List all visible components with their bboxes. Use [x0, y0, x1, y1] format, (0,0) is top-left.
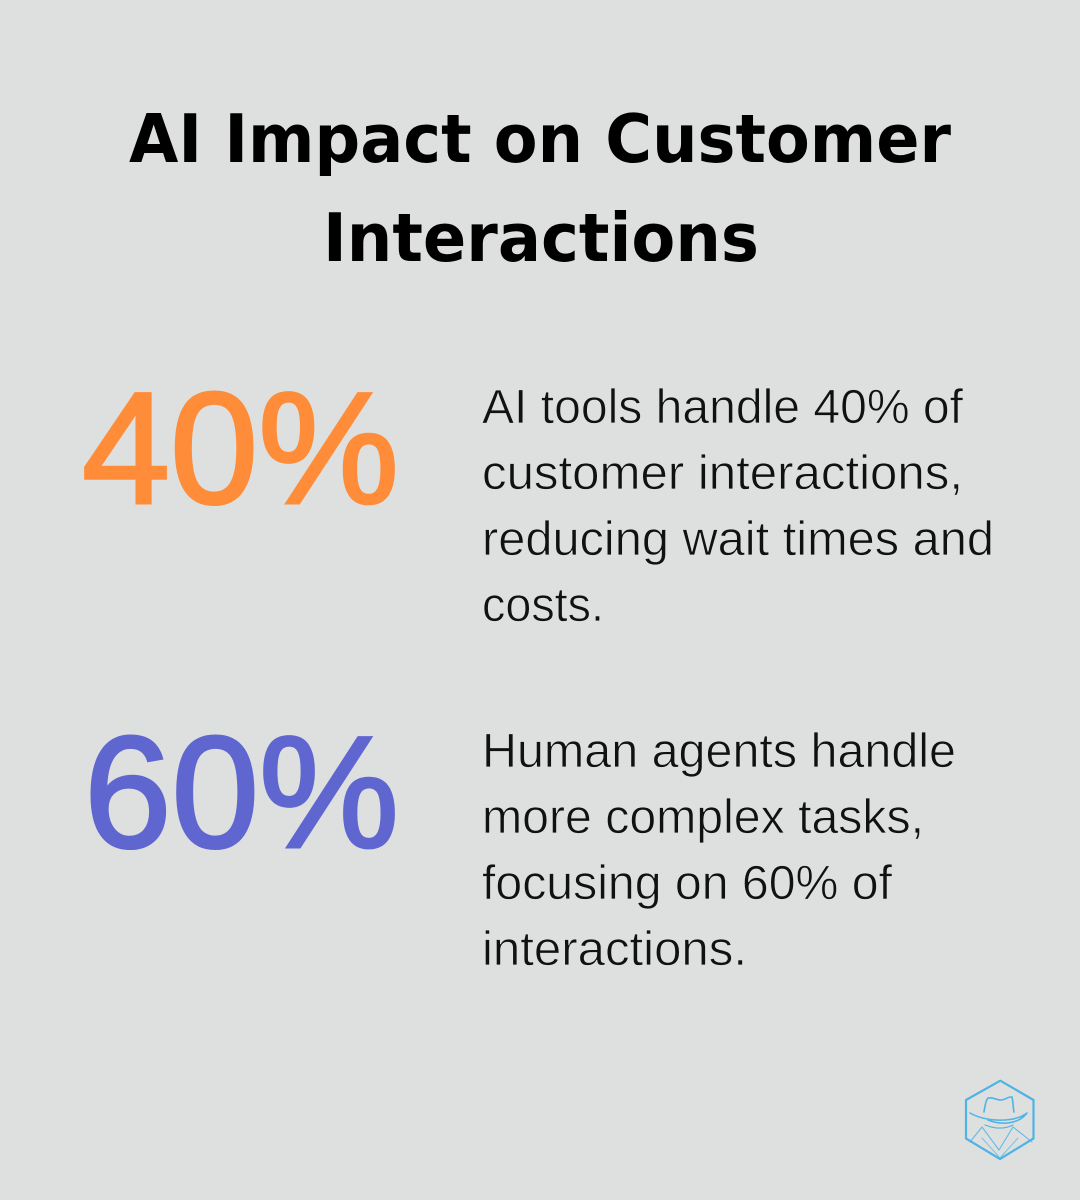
text block: AI tools: customer interactions, — [482, 447, 963, 500]
text block: AI tools: AI tools handle 40% of — [482, 381, 964, 434]
icon: hexagon logo with hat — [966, 1081, 1034, 1159]
text block: human agents: interactions. — [482, 923, 747, 976]
text block: human agents: Human agents handle — [482, 725, 956, 778]
stat: 60%: 60% — [84, 703, 399, 881]
title: AI Impact on Customer — [129, 100, 951, 178]
text block: AI tools: reducing wait times and — [482, 513, 994, 566]
text block: AI tools — [482, 381, 994, 632]
text block: human agents: focusing on 60% of — [482, 857, 893, 910]
text block: human agents: more complex tasks, — [482, 791, 924, 844]
stat: 40%: 40% — [82, 359, 399, 537]
title: Interactions — [323, 199, 759, 277]
text block: AI tools: costs. — [482, 579, 604, 632]
text block: human agents — [482, 725, 956, 976]
title — [129, 100, 951, 277]
